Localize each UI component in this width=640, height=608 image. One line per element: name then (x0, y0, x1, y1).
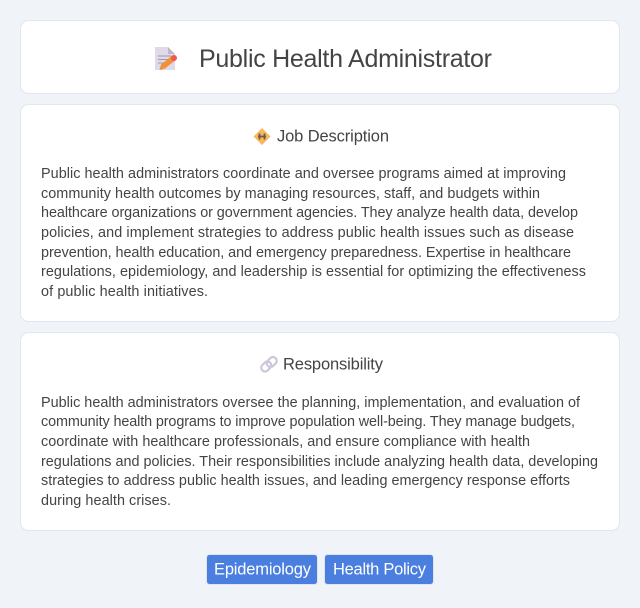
title: Public Health Administrator (199, 45, 492, 73)
heading: job description: Job Description (277, 128, 389, 146)
text block: job description: healthcare organizations or government agencies. They analyze health data, develop (41, 205, 578, 221)
text block: responsibility: during health crises. (41, 493, 171, 509)
text block: job description (41, 166, 586, 300)
tag: epidemiology: Epidemiology (214, 560, 312, 578)
text block: responsibility (41, 395, 598, 509)
panel: title card (20, 20, 620, 94)
text block: responsibility: Public health administrators oversee the planning, implementation, and evaluation of (41, 395, 581, 411)
text block: responsibility: community health programs to improve population well-being. They manage budgets, (41, 414, 575, 430)
icon: orange diamond (254, 128, 270, 145)
text block: job description: of public health initiatives. (41, 284, 208, 300)
text block: responsibility: regulations and policies. Their responsibilities include analyzing health data, developing (41, 454, 598, 470)
icon: document with pencil (155, 47, 177, 70)
panel: job description (20, 104, 620, 322)
text block: job description: policies, and implement strategies to address public health issues such as disease (41, 225, 574, 241)
text block: job description: regulations, epidemiology, and leadership is essential for optimizing the effectiveness (41, 264, 586, 280)
heading: responsibility: Responsibility (283, 356, 384, 374)
tag: health policy: Health Policy (333, 560, 427, 578)
text block: job description: prevention, health education, and emergency preparedness. Expertise in healthcare (41, 245, 571, 261)
text block: job description: community health outcomes by managing resources, staff, and budgets within (41, 186, 540, 202)
icon: chain link (260, 355, 278, 373)
panel: responsibility (20, 332, 620, 530)
text block: job description: Public health administrators coordinate and oversee programs aimed at improving (41, 166, 566, 182)
tag: epidemiology (206, 554, 318, 584)
text block: responsibility: coordinate with healthcare professionals, and ensure compliance with health (41, 434, 530, 450)
text block: responsibility: strategies to address public health issues, and leading emergency response efforts (41, 473, 570, 489)
tag: health policy (324, 554, 434, 584)
